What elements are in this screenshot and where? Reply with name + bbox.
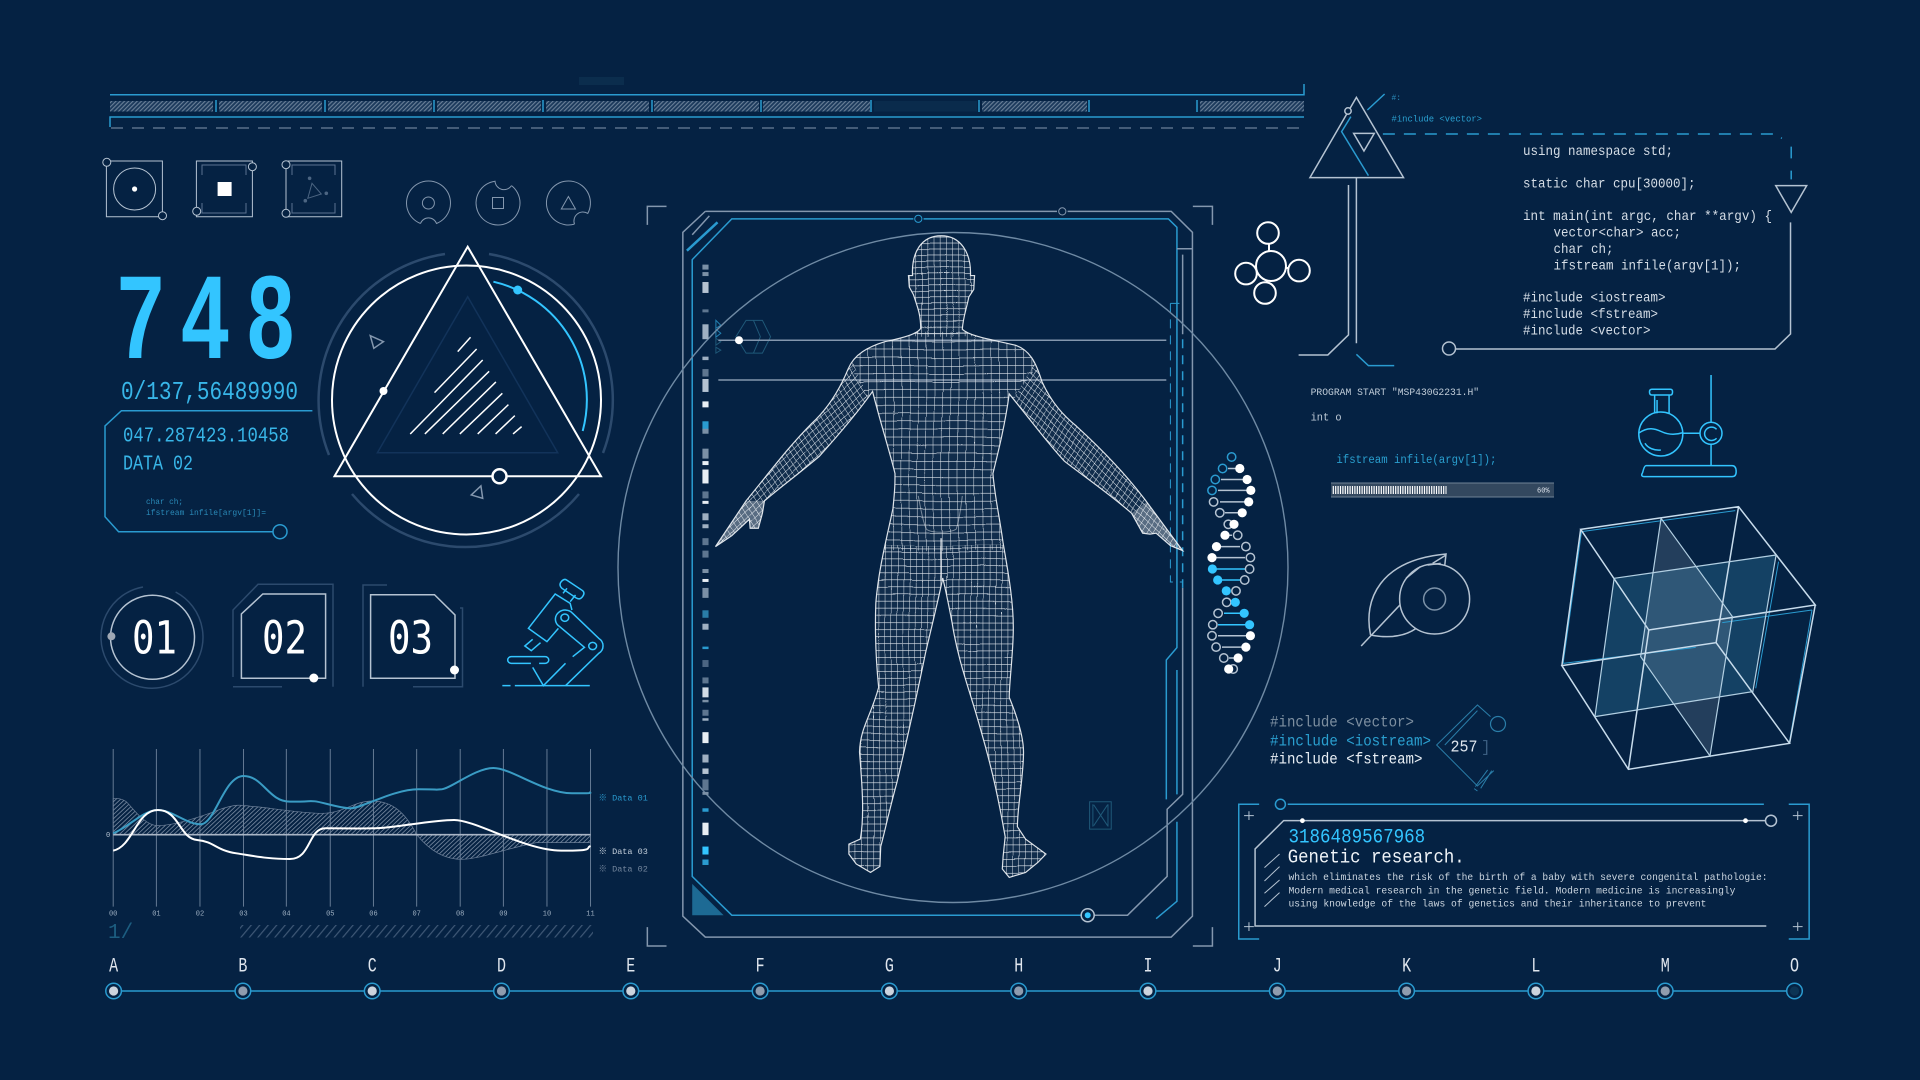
text block: program start: ifstream infile(argv[1]); <box>1336 454 1496 467</box>
timeline: J <box>1273 956 1282 979</box>
timeline: L <box>1531 956 1540 979</box>
text block: includes <box>1270 714 1431 769</box>
line chart: 10 <box>543 910 551 918</box>
timeline: F <box>756 956 765 979</box>
badge 02: 02 <box>262 611 307 664</box>
DNA helix <box>1207 453 1255 674</box>
timeline: H <box>1014 956 1023 979</box>
diamond counter 257: ] <box>1481 739 1491 757</box>
timeline: K <box>1402 956 1411 979</box>
badge 02 <box>233 584 333 687</box>
text block: program start: PROGRAM START "MSP430G2231.H" <box>1311 387 1479 399</box>
panel: data 02: ifstream infile[argv[1]]= <box>146 509 266 518</box>
line chart: 03 <box>239 910 248 918</box>
timeline: C <box>368 956 377 979</box>
panel: code block with triangles: #include <vector> <box>1392 114 1482 125</box>
panel: code block with triangles <box>1299 94 1807 366</box>
panel: code block with triangles: ifstream infile(argv[1]); <box>1554 258 1741 274</box>
text block: program start <box>1311 387 1496 467</box>
panel: data 02: char ch; <box>146 498 183 507</box>
panel: genetic research: Modern medical research in the genetic field. Modern medicine is increasingly <box>1288 885 1736 897</box>
badge 03: 03 <box>388 611 433 664</box>
timeline: A <box>109 956 118 979</box>
diamond counter 257: 257 <box>1450 739 1478 758</box>
top status bars <box>110 77 1304 128</box>
panel: genetic research: which eliminates the risk of the birth of a baby with severe congenital pathologie: <box>1288 872 1768 884</box>
line chart: 11 <box>586 910 595 918</box>
panel: data 02: 047.287423.10458 <box>123 426 289 449</box>
panel: genetic research: Genetic research. <box>1288 846 1465 868</box>
text block: program start: int o <box>1311 413 1342 425</box>
panel: genetic research: 3186489567968 <box>1288 826 1425 849</box>
diamond counter 257 <box>1437 705 1506 791</box>
line chart: ※ Data 01 <box>598 794 648 804</box>
timeline <box>106 956 1802 999</box>
icon: flask on stand <box>1638 375 1736 477</box>
timeline: E <box>626 956 635 979</box>
line chart <box>106 749 648 918</box>
wireframe human body <box>701 225 1195 894</box>
panel: code block with triangles: static char cpu[30000]; <box>1523 176 1696 192</box>
icon: microscope <box>502 579 603 686</box>
timeline: B <box>238 956 247 979</box>
timeline: G <box>885 956 894 979</box>
line chart: 0 <box>106 832 110 840</box>
line chart: 08 <box>456 910 464 918</box>
panel: code block with triangles: char ch; <box>1554 242 1614 258</box>
panel: body scan frame <box>618 206 1288 946</box>
icon: leaf and eye <box>1361 554 1470 646</box>
icon: molecule <box>1235 222 1310 304</box>
text block: includes: #include <vector> <box>1270 714 1414 732</box>
line chart: 06 <box>369 910 378 918</box>
line chart: 05 <box>326 910 335 918</box>
hatched strip <box>240 925 593 938</box>
text block: includes: #include <fstream> <box>1270 751 1422 769</box>
badge 01: 01 <box>132 611 177 664</box>
panel: code block with triangles: int main(int argc, char **argv) { <box>1523 209 1772 225</box>
icon: wireframe cube <box>1562 507 1815 769</box>
panel: code block with triangles: using namespace std; <box>1523 144 1673 160</box>
panel: data 02 <box>105 411 312 539</box>
icon: triangle in circle <box>319 247 613 547</box>
progress bar 60%: 60% <box>1537 488 1550 496</box>
icon: square target tiles <box>103 158 342 220</box>
panel: code block with triangles: #include <vector> <box>1523 323 1650 339</box>
number readout: 0/137,56489990 <box>121 377 298 407</box>
vitruvian circle <box>618 232 1288 902</box>
timeline: I <box>1144 956 1152 979</box>
icon: notched circle row <box>406 181 590 225</box>
panel: genetic research <box>1239 799 1809 939</box>
panel: code block with triangles: #include <fstream> <box>1523 307 1658 323</box>
timeline: D <box>497 956 506 979</box>
line chart: 07 <box>412 910 421 918</box>
line chart: 04 <box>282 910 291 918</box>
panel: data 02: DATA 02 <box>123 453 193 476</box>
timeline: O <box>1790 956 1799 979</box>
panel: code block with triangles: #include <iostream> <box>1523 291 1666 307</box>
badge 01 <box>101 587 203 688</box>
badge 03 <box>363 585 462 687</box>
text block: includes: #include <iostream> <box>1270 732 1431 750</box>
line chart: 09 <box>499 910 508 918</box>
line chart: 01 <box>152 910 161 918</box>
line chart: 00 <box>109 910 117 918</box>
line chart: 02 <box>196 910 204 918</box>
progress bar 60% <box>1331 483 1554 497</box>
panel: code block with triangles: vector<char> acc; <box>1554 226 1681 242</box>
barcode strip <box>702 265 709 865</box>
timeline: M <box>1661 956 1670 979</box>
line chart: ※ Data 03 <box>598 847 648 857</box>
chart page mark: 1/ <box>108 922 133 945</box>
big number 748: 748 <box>117 251 294 383</box>
line chart: ※ Data 02 <box>598 864 648 874</box>
panel: genetic research: using knowledge of the laws of genetics and their inheritance to prevent <box>1288 898 1706 910</box>
panel: code block with triangles: #: <box>1392 94 1401 103</box>
